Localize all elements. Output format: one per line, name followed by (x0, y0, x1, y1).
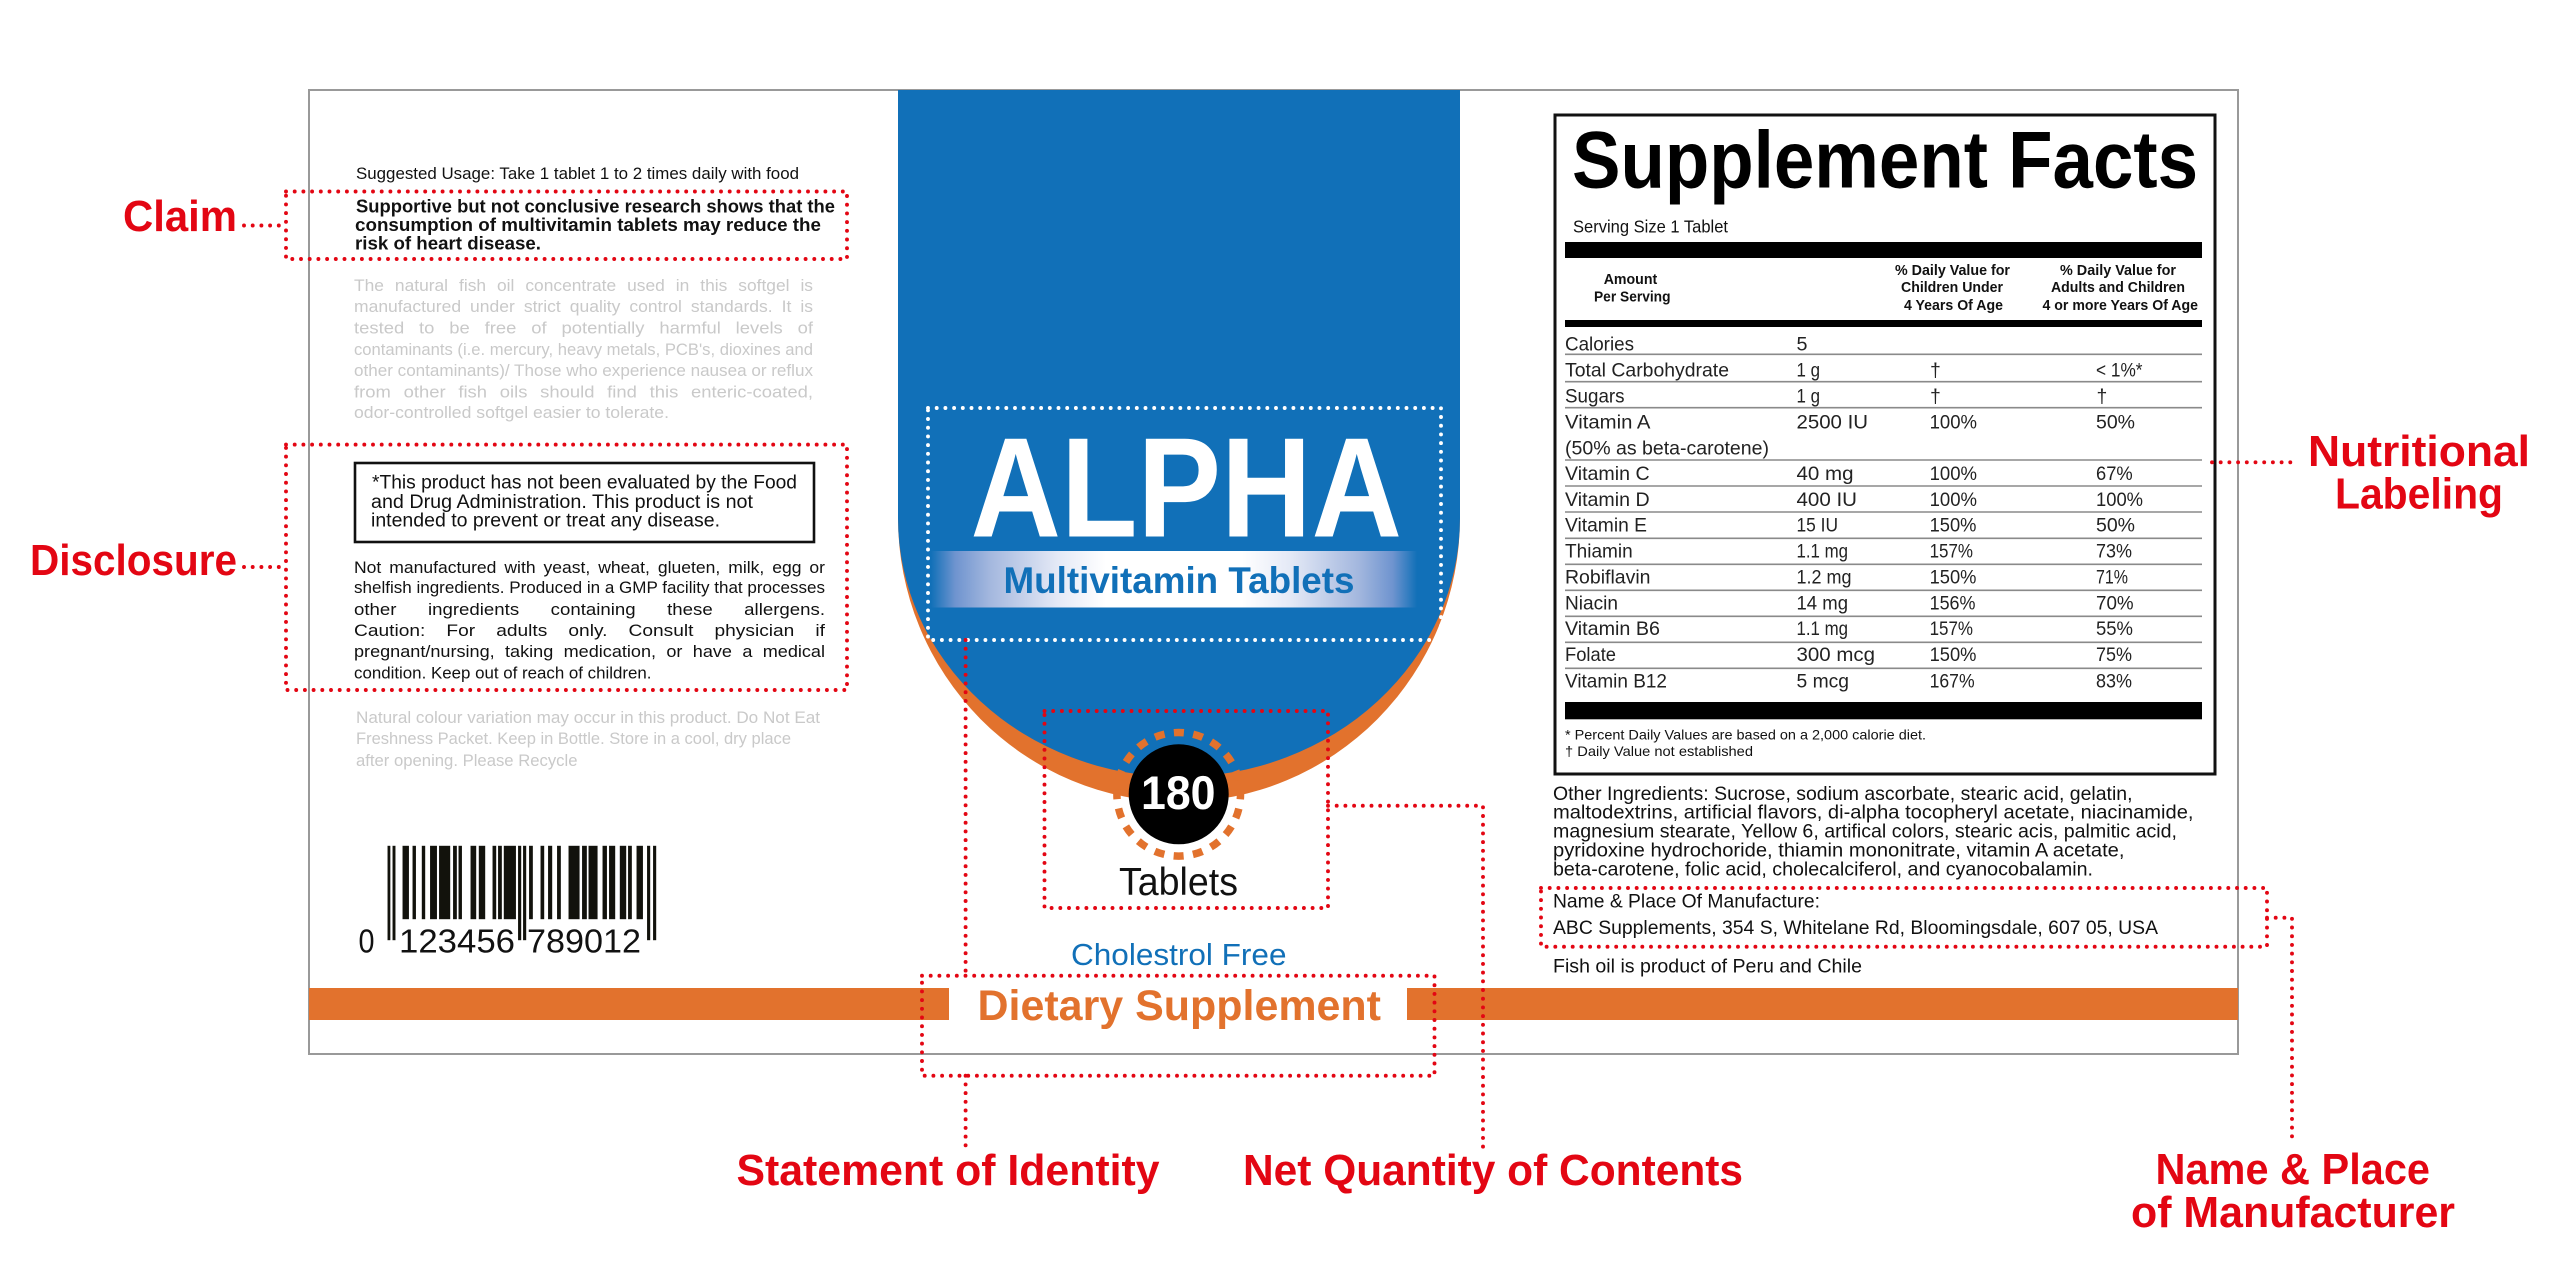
amount column: 15 IU (1796, 515, 1838, 537)
adults daily value column (2096, 360, 2143, 692)
allergen and caution paragraph: pregnant/nursing, taking medication, or have a medical (354, 642, 825, 661)
manufacturer text (1553, 891, 2158, 939)
nutrient names column: Vitamin B12 (1565, 670, 1667, 692)
children daily value column: 150% (1930, 515, 1976, 537)
nutrient names column: Thiamin (1565, 540, 1633, 562)
table column headers: % Daily Value for (1895, 263, 2010, 279)
children daily value column: 156% (1930, 592, 1976, 614)
adults daily value column: < 1%* (2096, 360, 2143, 382)
grey fish oil paragraph: odor-controlled softgel easier to tolerate. (354, 403, 669, 422)
nutrient names column: Total Carbohydrate (1565, 360, 1729, 382)
label: Net Quantity of Contents: Net Quantity of Contents (1243, 1146, 1743, 1195)
allergen and caution paragraph (354, 558, 825, 683)
amount column: 14 mg (1796, 592, 1848, 614)
nutrient names column: Vitamin C (1565, 463, 1650, 485)
adults daily value column: 70% (2096, 592, 2134, 614)
children daily value column: 100% (1930, 489, 1977, 511)
children daily value column: 167% (1930, 670, 1975, 692)
FDA disclaimer box: intended to prevent or treat any disease. (371, 510, 720, 532)
red dotted highlight: claim (286, 192, 847, 259)
nutrient names column: Sugars (1565, 386, 1625, 408)
nutrient names column: Calories (1565, 334, 1634, 356)
table column headers: Children Under (1901, 280, 2003, 296)
amount column: 40 mg (1796, 463, 1854, 485)
other ingredients paragraph (1553, 783, 2194, 880)
grey fish oil paragraph: The natural fish oil concentrate used in this softgel is (354, 276, 813, 295)
table row rules (1565, 354, 2202, 668)
label: Disclosure: Disclosure (30, 536, 237, 585)
amount column: 1.2 mg (1796, 566, 1852, 588)
allergen and caution paragraph: condition. Keep out of reach of children. (354, 664, 652, 683)
connector: net quantity (1328, 806, 1483, 1153)
FDA disclaimer box (355, 463, 814, 542)
FDA disclaimer box: *This product has not been evaluated by the Food (372, 472, 797, 494)
children daily value column: 157% (1930, 618, 1973, 640)
nutrient names column: (50% as beta-carotene) (1565, 437, 1769, 459)
claim text: consumption of multivitamin tablets may reduce the (355, 214, 821, 235)
nutrient names column: Robiflavin (1565, 566, 1650, 588)
table footnotes (1565, 726, 1926, 759)
nutrient names column: Niacin (1565, 592, 1618, 614)
grey colour variation note (356, 708, 820, 770)
usage text: Suggested Usage: Take 1 tablet 1 to 2 times daily with food (356, 164, 799, 183)
grey fish oil paragraph: manufactured under strict quality control standards. It is (354, 297, 813, 316)
count badge: 180: 180 (1141, 766, 1216, 819)
bottom orange band (309, 988, 2238, 1020)
allergen and caution paragraph: Caution: For adults only. Consult physician if (354, 621, 825, 640)
other ingredients paragraph: Other Ingredients: Sucrose, sodium ascorbate, stearic acid, gelatin, (1553, 783, 2132, 805)
label: Name and Place of Manufacturer: Name & Place (2156, 1145, 2430, 1194)
grey colour variation note: after opening. Please Recycle (356, 751, 578, 770)
amount column: 400 IU (1796, 489, 1857, 511)
panel: blue bottle front shield (898, 90, 1460, 802)
table column headers: 4 Years Of Age (1904, 298, 2003, 314)
other ingredients paragraph: pyridoxine hydrochoride, thiamin mononitrate, vitamin A acetate, (1553, 840, 2124, 862)
children daily value column: 150% (1930, 644, 1976, 666)
supplement facts title: Supplement Facts (1572, 115, 2198, 205)
table column headers: 4 or more Years Of Age (2042, 298, 2198, 314)
grey fish oil paragraph: other contaminants)/ Those who experience nausea or reflux (354, 361, 813, 380)
adults daily value column: 50% (2096, 411, 2135, 433)
barcode: 123456 (399, 924, 515, 961)
label: Name and Place of Manufacturer: of Manufacturer (2131, 1188, 2455, 1237)
children daily value column: † (1930, 360, 1941, 382)
children daily value column: 100% (1930, 411, 1977, 433)
table footnotes: * Percent Daily Values are based on a 2,000 calorie diet. (1565, 726, 1926, 742)
label: Nutritional Labeling: Labeling (2335, 469, 2503, 518)
black divider bars (1565, 242, 2202, 719)
barcode (358, 846, 656, 961)
grey fish oil paragraph: from other fish oils should find this enteric-coated, (354, 382, 813, 402)
amount column: 1 g (1796, 386, 1820, 408)
connector: name and place (2267, 918, 2292, 1137)
grey colour variation note: Freshness Packet. Keep in Bottle. Store in a cool, dry place (356, 729, 791, 748)
other ingredients paragraph: magnesium stearate, Yellow 6, artifical colors, stearic acis, palmitic acid, (1553, 820, 2177, 842)
adults daily value column: 50% (2096, 515, 2135, 537)
adults daily value column: 73% (2096, 540, 2132, 562)
panel: supplement facts (1555, 115, 2215, 774)
adults daily value column: † (2096, 386, 2107, 408)
adults daily value column: 55% (2096, 618, 2133, 640)
barcode: 0 (358, 924, 374, 961)
connector: claim (244, 224, 285, 227)
amount column: 2500 IU (1796, 411, 1868, 433)
table footnotes: † Daily Value not established (1565, 743, 1753, 759)
Tablets caption: Tablets (1119, 861, 1238, 904)
adults daily value column: 100% (2096, 489, 2143, 511)
label: Name and Place of Manufacturer (2131, 1145, 2455, 1237)
grey fish oil paragraph: tested to be free of potentially harmful levels of (354, 318, 813, 338)
product name ALPHA: ALPHA (970, 408, 1402, 568)
gradient band with product type: Multivitamin Tablets (1004, 560, 1354, 601)
nutrient names column: Vitamin A (1565, 411, 1650, 433)
red dotted highlight: net quantity (1044, 711, 1328, 908)
origin note: Fish oil is product of Peru and Chile (1553, 956, 1862, 978)
children daily value column: 100% (1930, 463, 1977, 485)
grey fish oil paragraph (354, 276, 813, 422)
connector: disclosure (244, 565, 285, 569)
children daily value column (1930, 360, 1977, 692)
other ingredients paragraph: maltodextrins, artificial flavors, di-alpha tocopheryl acetate, niacinamide, (1553, 801, 2194, 823)
amount column: 300 mcg (1796, 644, 1875, 666)
connector: nutritional labeling (2212, 460, 2294, 464)
count badge: 180 (1117, 732, 1240, 856)
table column headers: Amount (1604, 272, 1657, 288)
manufacturer text: ABC Supplements, 354 S, Whitelane Rd, Bloomingsdale, 607 05, USA (1553, 917, 2158, 939)
red dotted highlight: name and place (1541, 888, 2267, 947)
grey colour variation note: Natural colour variation may occur in this product. Do Not Eat (356, 708, 820, 727)
amount column (1796, 334, 1875, 692)
grey fish oil paragraph: contaminants (i.e. mercury, heavy metals, PCB's, dioxines and (354, 340, 813, 359)
adults daily value column: 71% (2096, 566, 2128, 588)
barcode: 789012 (527, 924, 641, 961)
other ingredients paragraph: beta-carotene, folic acid, cholecalciferol, and cyanocobalamin. (1553, 858, 2093, 880)
adults daily value column: 75% (2096, 644, 2132, 666)
red dotted highlight: statement of identity (922, 976, 1434, 1076)
panel: product label outline (309, 90, 2238, 1054)
red dotted highlight: disclosure (286, 445, 847, 690)
adults daily value column: 67% (2096, 463, 2133, 485)
allergen and caution paragraph: Not manufactured with yeast, wheat, glueten, milk, egg or (354, 558, 825, 577)
manufacturer text: Name & Place Of Manufacture: (1553, 891, 1820, 913)
amount column: 1 g (1796, 360, 1820, 382)
nutrient names column: Vitamin B6 (1565, 618, 1660, 640)
label: Nutritional Labeling (2308, 427, 2530, 518)
connector: statement of identity (964, 640, 968, 1152)
claim text: risk of heart disease. (355, 233, 541, 254)
nutrient names column (1565, 334, 1769, 692)
Dietary Supplement text: Dietary Supplement (978, 982, 1381, 1030)
children daily value column: 157% (1930, 540, 1973, 562)
label: Statement of Identity: Statement of Identity (736, 1146, 1160, 1195)
children daily value column: 150% (1930, 566, 1976, 588)
claim text: Supportive but not conclusive research shows that the (356, 196, 835, 216)
label: Nutritional Labeling: Nutritional (2308, 427, 2530, 476)
amount column: 5 mcg (1796, 670, 1849, 692)
table column headers: Per Serving (1594, 290, 1670, 306)
amount column: 1.1 mg (1796, 618, 1848, 640)
table column headers: % Daily Value for (2060, 263, 2176, 279)
serving size: Serving Size 1 Tablet (1573, 217, 1728, 237)
nutrient names column: Folate (1565, 644, 1616, 666)
amount column: 1.1 mg (1796, 540, 1848, 562)
white dotted highlight: brand name (928, 408, 1441, 640)
Cholestrol Free text: Cholestrol Free (1071, 937, 1286, 972)
allergen and caution paragraph: other ingredients containing these allergens. (354, 600, 825, 619)
allergen and caution paragraph: shelfish ingredients. Produced in a GMP facility that processes (354, 578, 825, 597)
adults daily value column: 83% (2096, 670, 2132, 692)
FDA disclaimer box: and Drug Administration. This product is not (371, 492, 754, 513)
nutrient names column: Vitamin D (1565, 489, 1650, 511)
amount column: 5 (1796, 334, 1808, 356)
claim text (355, 196, 835, 254)
nutrient names column: Vitamin E (1565, 515, 1647, 537)
children daily value column: † (1930, 386, 1941, 408)
label: Claim: Claim (123, 192, 237, 241)
gradient band with product type (931, 551, 1417, 608)
table column headers: Adults and Children (2051, 280, 2185, 296)
table column headers (1594, 263, 2198, 314)
